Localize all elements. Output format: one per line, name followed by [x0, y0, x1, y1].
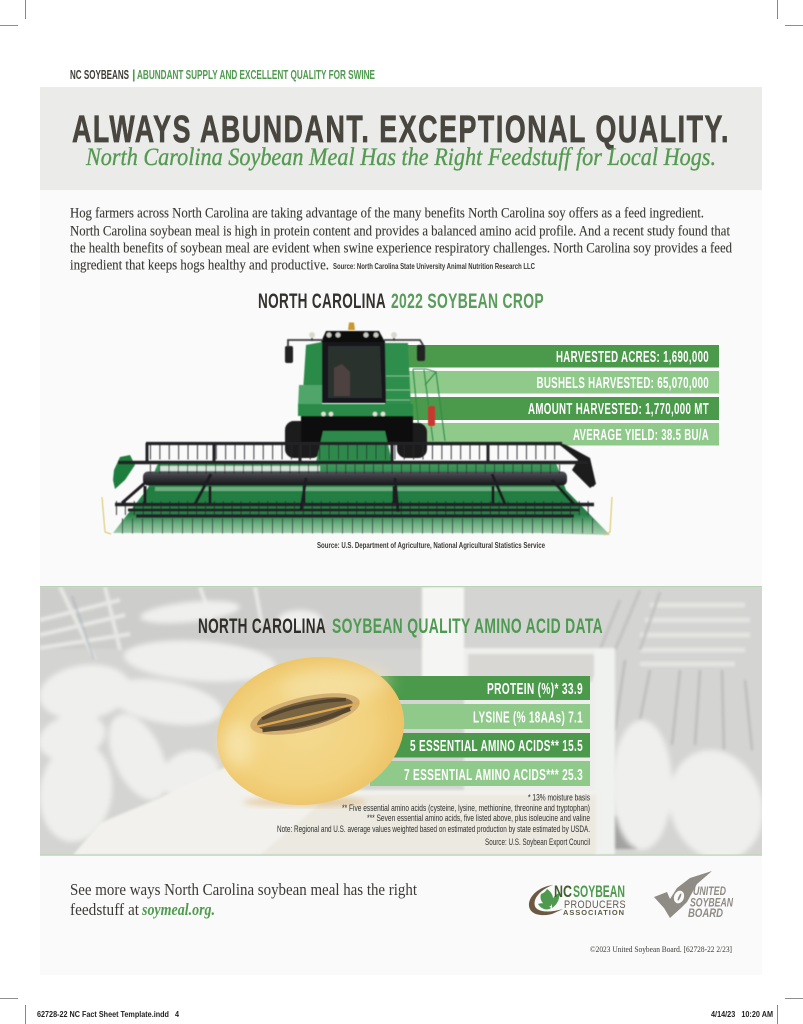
copyright line: ©2023 United Soybean Board. [62728-22 2/23] — [590, 945, 732, 954]
feed trough and post — [422, 587, 615, 855]
footer call to action: soymeal.org. — [141, 900, 215, 919]
amino acid footnotes: ** Five essential amino acids (cysteine, lysine, methionine, threonine and tryptophan) — [342, 803, 590, 813]
combine harvester — [102, 322, 612, 535]
header platform — [113, 463, 610, 535]
roof — [321, 331, 385, 342]
amino acid footnotes: *** Seven essential amino acids, five listed above, plus isoleucine and valine — [367, 813, 590, 823]
main auger tube — [143, 472, 567, 486]
header right end frame — [556, 442, 596, 488]
cab body left — [303, 342, 322, 392]
logo: NC Soybean Producers Association: ASSOCIATION — [563, 908, 625, 917]
page panel background — [40, 87, 762, 975]
logo: NC Soybean Producers Association: NC — [554, 883, 572, 901]
side lamps — [309, 332, 397, 338]
intro paragraph: the health benefits of soybean meal are evident when swine experience respiratory challenges. North Carolina soy provides a feed — [70, 240, 733, 256]
foreground sack and floor — [73, 760, 600, 855]
rear wheels — [285, 421, 427, 458]
amino acid bars: 7 ESSENTIAL AMINO ACIDS*** 25.3 — [404, 767, 583, 784]
soybean hilum — [247, 685, 363, 743]
amino acid bars: PROTEIN (%)* 33.9 — [487, 681, 583, 698]
footer call to action: feedstuff at — [70, 900, 139, 919]
running head: ABUNDANT SUPPLY AND EXCELLENT QUALITY FOR SWINE — [137, 68, 375, 82]
ladder — [413, 369, 445, 441]
printer slug right: 4/14/23 10:20 AM — [711, 1010, 773, 1019]
heading: amino acid data: SOYBEAN QUALITY AMINO ACID DATA — [332, 615, 603, 638]
extinguisher — [428, 406, 435, 426]
printer slug left: 62728-22 NC Fact Sheet Template.indd 4 — [37, 1010, 179, 1019]
amino acid footnotes: Note: Regional and U.S. average values weighted based on estimated production by state estimated by USDA. — [277, 824, 590, 834]
logo: United Soybean Board: SOYBEAN — [690, 896, 733, 910]
logo: United Soybean Board: UNITED — [693, 884, 726, 898]
panel: amino acid section with pig barn photo — [33, 587, 777, 872]
logo: NC Soybean Producers Association — [529, 883, 626, 917]
tube tines — [150, 464, 560, 474]
footer call to action: See more ways North Carolina soybean meal has the right — [70, 880, 417, 899]
logo: NC Soybean Producers Association: SOYBEAN — [573, 883, 625, 901]
heading: amino acid data — [198, 615, 603, 638]
front band — [298, 404, 413, 416]
lower light strip — [155, 487, 560, 491]
intro paragraph: North Carolina soybean meal is high in protein content and provides a balanced amino acid profile. And a recent study found that — [70, 224, 730, 240]
amino acid footnotes: Source: U.S. Soybean Export Council — [485, 837, 590, 847]
crop stat bars — [405, 345, 719, 446]
icon: soybean — [203, 640, 418, 822]
crop stat labels — [528, 349, 709, 444]
upper light strip — [160, 466, 320, 471]
yellow wires — [102, 497, 612, 535]
intro paragraph — [70, 206, 733, 274]
mirrors and arms — [285, 345, 425, 363]
heading: 2022 soybean crop: 2022 SOYBEAN CROP — [391, 290, 544, 313]
lower body — [301, 414, 413, 444]
amino acid bars: LYSINE (% 18AAs) 7.1 — [473, 710, 583, 726]
cab body right — [385, 343, 411, 408]
cab glass — [322, 341, 386, 403]
subtitle: North Carolina Soybean Meal Has the Right Feedstuff for Local Hogs. — [85, 142, 716, 171]
head lights — [321, 412, 385, 416]
amino acid bars: 5 ESSENTIAL AMINO ACIDS** 15.5 — [410, 738, 583, 755]
header band — [40, 87, 762, 190]
reel arms — [122, 474, 574, 512]
beacon — [348, 322, 355, 330]
intro paragraph: Hog farmers across North Carolina are taking advantage of the many benefits North Carolina soy offers as a feed ingredient. — [70, 206, 704, 222]
reel frame bars — [115, 443, 594, 516]
heading: amino acid data: NORTH CAROLINA — [198, 615, 326, 638]
running head — [70, 68, 375, 82]
intro paragraph: Source: North Carolina State University Animal Nutrition Research LLC — [333, 262, 535, 271]
amino acid bars — [370, 676, 590, 786]
logo: United Soybean Board — [654, 871, 733, 920]
running head: NC SOYBEANS — [70, 68, 129, 82]
logo: NC Soybean Producers Association: PRODUCERS — [564, 899, 626, 911]
crop source note: Source: U.S. Department of Agriculture, National Agricultural Statistics Service — [317, 540, 545, 550]
section rules — [40, 586, 762, 856]
heading: 2022 soybean crop: NORTH CAROLINA — [258, 290, 386, 313]
running head: | — [132, 68, 136, 82]
crop stat labels: HARVESTED ACRES: 1,690,000 — [556, 349, 709, 366]
amino acid footnotes — [277, 792, 590, 847]
reel tines lower — [116, 501, 592, 515]
heading: 2022 soybean crop — [258, 290, 544, 313]
pigs — [40, 599, 762, 854]
cutter teeth — [122, 518, 596, 534]
header left end shield — [113, 455, 135, 489]
intro paragraph: ingredient that keeps hogs healthy and productive. — [70, 258, 329, 274]
crop stat labels: AVERAGE YIELD: 38.5 BU/A — [573, 427, 709, 444]
footer call to action — [70, 880, 417, 919]
barn fence and slats — [40, 587, 752, 849]
logo: United Soybean Board: BOARD — [688, 906, 723, 920]
feeder throat — [316, 431, 392, 462]
reel tines upper — [150, 444, 560, 460]
amino acid footnotes: * 13% moisture basis — [528, 792, 590, 802]
